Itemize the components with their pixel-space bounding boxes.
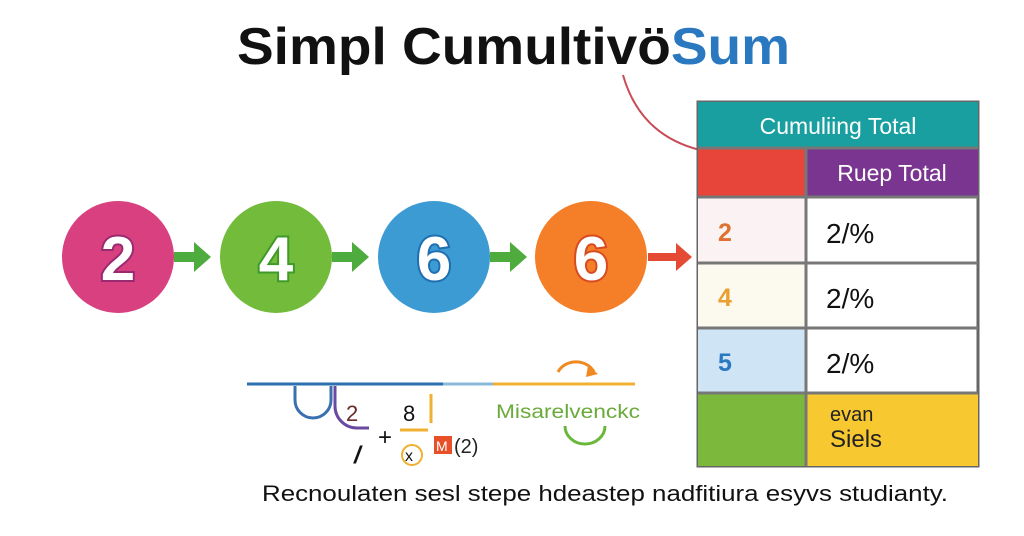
formula diagram: x — [405, 448, 413, 465]
circle 6 orange: 6 — [574, 225, 608, 294]
step circles — [62, 201, 647, 313]
formula diagram — [247, 362, 640, 469]
subheader — [698, 148, 978, 197]
row 3 — [698, 328, 874, 393]
formula diagram: Misarelvenckc — [496, 402, 640, 423]
caption: Recnoulaten sesl stepe hdeastep nadfitiura esyvs studianty. — [262, 481, 948, 506]
row 3: 2/% — [826, 348, 874, 379]
formula diagram: M — [436, 438, 448, 454]
table — [698, 102, 978, 466]
title: Simpl Cumultivö Sum — [237, 18, 790, 76]
row 2: 2/% — [826, 283, 874, 314]
circle 6 blue — [378, 201, 490, 313]
row 3: 5 — [718, 349, 732, 377]
formula diagram: + — [378, 424, 392, 451]
circle 6 orange — [535, 201, 647, 313]
row 4: evan — [830, 404, 873, 426]
subheader: Ruep Total — [837, 160, 947, 186]
row 2 — [698, 263, 874, 328]
row 2: 4 — [718, 284, 732, 312]
formula diagram: / — [353, 442, 363, 469]
row 1 — [698, 197, 874, 263]
formula diagram: 8 — [403, 401, 415, 426]
row 4 — [698, 393, 978, 466]
formula diagram: (2) — [454, 436, 478, 458]
circle 4 — [220, 201, 332, 313]
circle 6 blue: 6 — [417, 225, 451, 294]
circle 2 — [62, 201, 174, 313]
formula diagram: 2 — [346, 401, 358, 426]
arrows — [174, 242, 692, 272]
table header: Cumuliing Total — [760, 113, 916, 139]
row 4: Siels — [830, 426, 882, 453]
circle 2: 2 — [101, 225, 135, 294]
row 1: 2/% — [826, 218, 874, 249]
row 1: 2 — [718, 219, 732, 247]
connector line — [623, 75, 700, 150]
circle 4: 4 — [259, 225, 294, 294]
table header — [698, 102, 978, 148]
